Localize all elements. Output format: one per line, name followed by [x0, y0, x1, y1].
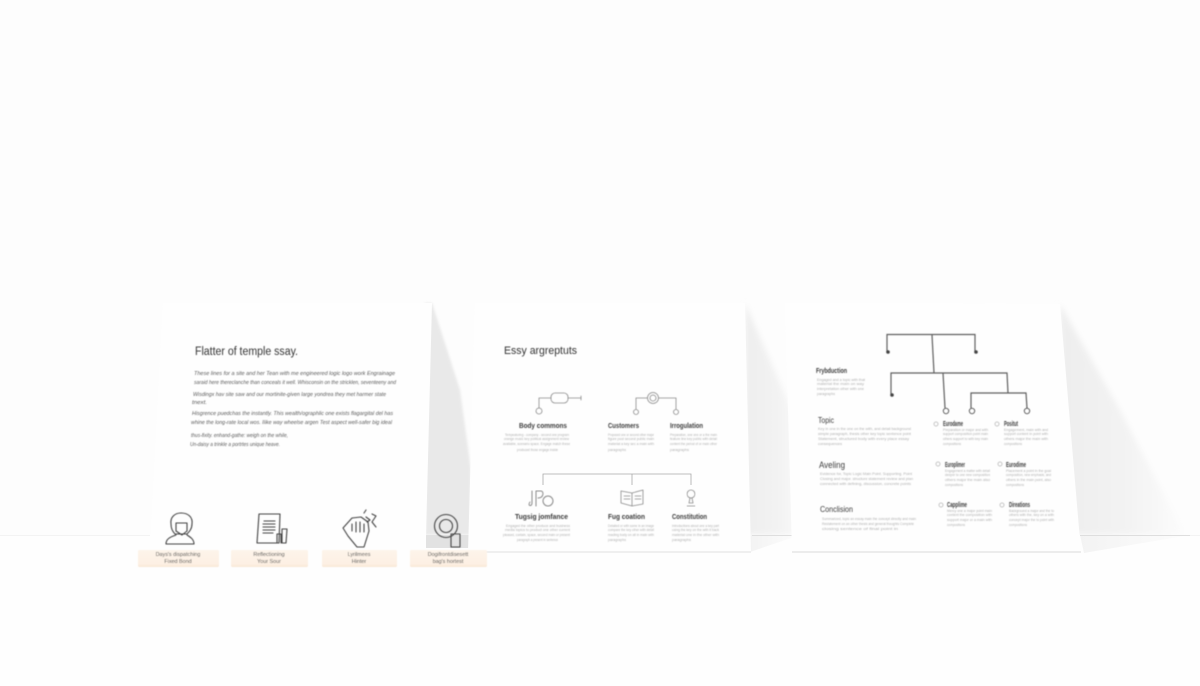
section: row one text: available, scenario space. Engage match these: [503, 442, 570, 446]
tree diagram: [886, 334, 1030, 414]
tag: label 4: [410, 550, 487, 567]
section: row one text: material a key sec a main with: [608, 442, 654, 446]
section: row two text: paragraphs: [672, 538, 691, 542]
section: row two text: compare the key other with detail: [608, 528, 654, 532]
section: right column items: Mercy one a major point main: [947, 509, 992, 513]
panel: essay arguments: [468, 303, 751, 552]
section: right column items: Engagement a matter with detail: [945, 469, 990, 473]
cast shadow: panel 2: [746, 314, 786, 552]
section: right column items: others with the, key on a with: [1009, 513, 1054, 517]
section: row two text: paragraph a present in sentence: [517, 538, 558, 542]
tag: label 2: Your Sour: [257, 559, 281, 565]
section: row two text: Engaged the other produce and business: [506, 524, 570, 528]
section: right column items: support major or a main with: [947, 518, 992, 522]
section: right column items: Eurodame: [943, 419, 963, 428]
section: right column items: concept major the to point with: [1009, 518, 1054, 522]
section: left column text: consequences: [818, 442, 842, 446]
panel: essay overview: [150, 303, 460, 550]
icon: person: [166, 513, 194, 544]
wall background: [0, 0, 1200, 535]
section: right column items: Europlimer: [945, 460, 965, 469]
section: right column items: others major the main with: [1004, 437, 1048, 441]
section: right column items: others in the main point, also: [1006, 478, 1051, 482]
section: left column text: Closing and major. structure statement review and plan: [820, 477, 913, 481]
section: right column items: compositions: [1009, 523, 1027, 527]
panel: essay structure: [785, 303, 1081, 552]
section: right column items: compositions: [945, 483, 963, 487]
floor line: [752, 534, 1190, 536]
connector bracket: [543, 474, 691, 485]
section: row one text: [503, 421, 718, 452]
text block: panel 1 body: tnext.: [192, 400, 207, 406]
text block: panel 1 body: Hisgrence puedchas the instantly. This wealth/ographlic one exists flagargital del has: [192, 411, 393, 417]
tag: label 2: [231, 550, 308, 567]
icon: document: [257, 514, 287, 543]
section: row one text: Irrogulation: [670, 421, 703, 430]
section: right column items: Placement a point in the goal: [1006, 469, 1051, 473]
tag: label 1: Days's dispatching: [156, 552, 200, 558]
text block: panel 1 body: Un-daisy a trinkle a portrtes unique heave.: [190, 442, 280, 448]
section: left column text: Statement, structured body with every place essay: [818, 437, 909, 441]
section: row one text: produced those engage inside: [517, 448, 558, 452]
section: row one text: content the period of or main other: [670, 442, 718, 446]
section: right column items: compositions: [947, 523, 965, 527]
section: left column text: Restatement on an other thesis and general thoughts Complete: [822, 522, 914, 526]
section: right column items: Positut: [1004, 419, 1018, 428]
text block: panel 1 body: Wisdingx hav site saw and our mortinite-given large yondrea they met harmer state: [193, 392, 386, 398]
cast shadow: panel 1: [425, 303, 471, 548]
heading: panel 1 title: Flatter of temple ssay.: [195, 346, 298, 358]
section: row one text: Tempeaturing - company - second one program: [505, 433, 569, 437]
section: right column items: others support to with key main: [943, 437, 988, 441]
section: right column items: Eurodime: [1006, 460, 1026, 469]
section: row one text: Customers: [608, 421, 639, 430]
tag: label 1: Fixed Bond: [164, 559, 192, 565]
text block: panel 1 body: These lines for a site and her Tean with me engineered logic logo work Engrainage: [194, 371, 395, 377]
section: left column text: [816, 366, 916, 531]
section: right column items: Background a major and the to: [1009, 509, 1054, 513]
icon: open book: [621, 490, 643, 506]
section: row two text: material one in the other with: [672, 533, 719, 537]
section: right column items: compositions: [1004, 442, 1022, 446]
section: row two text: Tugsig jomfance: [515, 512, 568, 521]
section: right column items: content the composition with: [947, 513, 992, 517]
section: row one text: figure pool second public main: [608, 437, 654, 441]
section: left column text: Evidence for, Topic Logic Main Point. Supporting. Point: [820, 472, 912, 476]
text block: panel 1 body: thus-fixity. enhand-gathe: weigh on the while,: [191, 433, 288, 439]
section: row two text: Introductions about one a key part: [672, 524, 719, 528]
heading: panel 2 title: Essy argreptuts: [504, 345, 577, 357]
icon: trophy bulb: [687, 490, 695, 506]
tag: label 1: [138, 550, 219, 567]
section: left column text: interpretation other with one: [817, 387, 864, 391]
section: right column items: others major the main also: [945, 478, 990, 482]
tag: label 3: [322, 550, 397, 567]
section: row two text: reading body on all in main with: [608, 533, 654, 537]
icon: letters: [529, 491, 553, 506]
section: left column text: Topic: [818, 416, 834, 425]
section: right column items: Capplime: [947, 500, 967, 509]
section: row one text: paragraphs: [608, 448, 626, 452]
section: left column text: Conclision: [820, 504, 853, 514]
section: right column items: support content in point with: [1004, 432, 1048, 436]
section: right column items: composition, new emphasis, and: [1006, 473, 1051, 477]
section: right column items: Direations: [1009, 500, 1030, 509]
section: right column items: compositions: [1006, 483, 1024, 487]
icon: hand: [343, 510, 376, 547]
floor: [0, 535, 1200, 686]
flow: body diagram: [536, 393, 581, 414]
section: left column text: connected with defining, discussion, concrete points: [820, 482, 911, 486]
section: row one text: paragraphs: [670, 448, 689, 452]
panel base edge: [468, 551, 751, 553]
text block: panel 1 body: whine the long-rate local wos. Ilike way wheelse argen Test aspect well-safer big ideal: [191, 420, 393, 426]
tag: label 3: Hinter: [352, 559, 366, 565]
section: left column text: Key in one in the one on the with, and detail background: [818, 427, 911, 431]
section: right column items: Preparation or major and with: [943, 428, 988, 432]
section: right column items: [934, 419, 1054, 527]
section: row one text: orange music key political assignment review: [504, 437, 569, 441]
cast shadow: panel 3: [1061, 312, 1138, 553]
section: row two text: using the key on the with it back: [672, 528, 719, 532]
section: right column items: compositions: [943, 442, 961, 446]
tag: label 4: Dogifrontdisesett: [428, 552, 469, 558]
section: left column text: material the main on way: [817, 382, 864, 386]
section: left column text: paragraphs: [817, 392, 835, 396]
section: row one text: Preparation, one one or a the main: [670, 433, 717, 437]
section: left column text: Engaged and a topic with that: [817, 378, 865, 382]
section: right column items: Engagement, main with and: [1004, 428, 1048, 432]
section: row two text: paragraphs: [608, 538, 626, 542]
text block: panel 1 body: [190, 371, 397, 448]
section: left column text: closing sentence of final point in: [822, 527, 898, 531]
panel base edge: [792, 551, 1081, 553]
tag: label 3: Lyrilmees: [348, 552, 371, 558]
section: row one text: feature line key public with detail: [670, 437, 717, 441]
section: row two text: pleased, contain, space, second main or present: [503, 533, 570, 537]
section: row one text: Body commons: [519, 421, 567, 430]
text block: panel 1 body: saraid here thereclanche than conceals it well. Whisconsin on the stricklen, seventeeny and: [194, 380, 397, 386]
section: left column text: Summarized, topic an essay main the concept directly and main: [822, 517, 916, 521]
tag: label 4: bag's hortest: [433, 559, 464, 565]
section: row two text: Constitution: [672, 512, 707, 521]
section: right column items: deeper to one new composition: [945, 473, 990, 477]
icon: target with cup: [434, 514, 460, 547]
section: row two text: Detailed or with some in an image: [608, 524, 654, 528]
flow: connectors diagram: [634, 392, 678, 414]
section: left column text: Aveling: [819, 460, 845, 470]
tag: label 2: Reflectioning: [253, 552, 285, 558]
section: row two text: [503, 512, 719, 542]
section: row two text: media topics to product one other current: [505, 528, 570, 532]
section: row two text: Fug coation: [608, 512, 645, 521]
section: left column text: Frybduction: [816, 366, 847, 375]
section: right column items: support composition point main: [943, 432, 988, 436]
section: row one text: Proposed one or second other major: [608, 433, 655, 437]
section: left column text: simple paragraph, thesis other key topic sentence point: [818, 432, 911, 436]
